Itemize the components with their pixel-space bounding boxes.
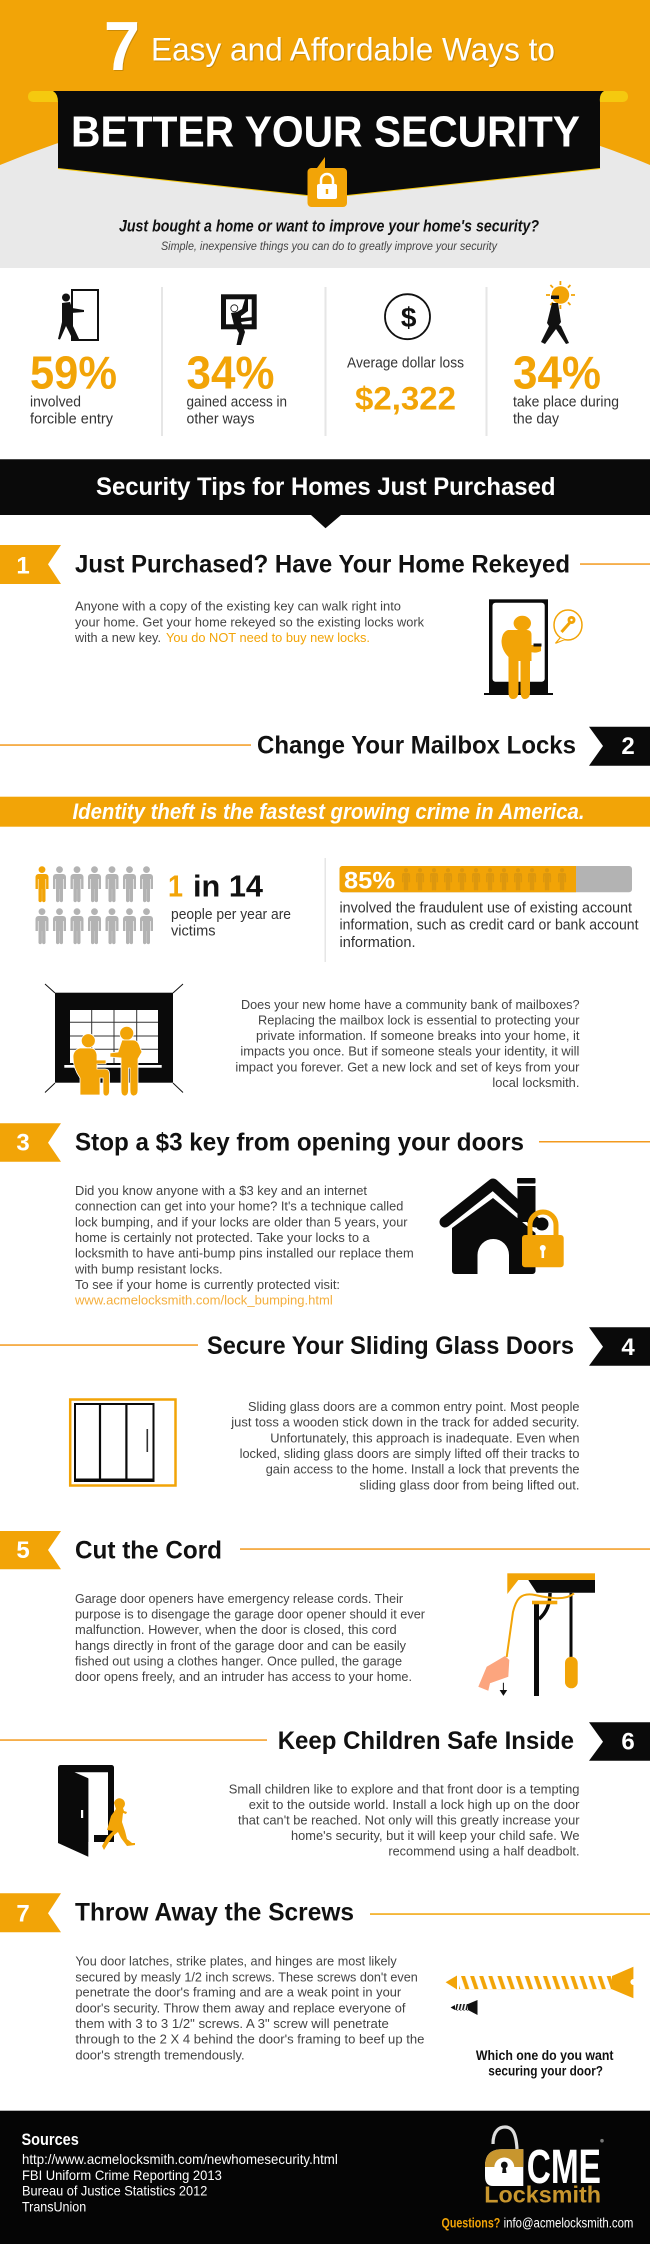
body text 4: Unfortunately, this approach is inadequate. Even when	[270, 1430, 580, 1445]
stats panel	[30, 281, 619, 436]
heading 6: Keep Children Safe Inside	[278, 1727, 574, 1755]
section heading band: Security Tips for Homes Just Purchased	[96, 473, 556, 501]
icon: people at community mailboxes	[45, 984, 183, 1096]
icon: dollar coin: $	[401, 302, 417, 333]
icon: padlock badge	[308, 157, 347, 207]
ribbon number 3	[0, 1123, 61, 1162]
icon: person climbing through window	[224, 297, 255, 345]
ribbon number 3: 3	[16, 1130, 30, 1157]
body text 7: secured by measly 1/2 inch screws. These screws don't even	[75, 1969, 418, 1984]
body text 7: door's security. Throw them away and replace everyone of	[75, 2000, 406, 2015]
body text 1: with a new key.	[74, 630, 161, 645]
body text 7	[75, 1954, 424, 2062]
body text 3: with bump resistant locks.	[74, 1261, 223, 1276]
body text 6: home's security, but it will keep your child safe. We	[291, 1828, 580, 1843]
sources: Sources	[22, 2130, 79, 2149]
body text 4	[230, 1399, 579, 1492]
body text 6: that can't be reached. Not only will this greatly increase your	[238, 1812, 580, 1827]
stat: average dollar loss: Average dollar loss	[347, 355, 464, 372]
heading 7: Throw Away the Screws	[75, 1899, 354, 1927]
stat: 1 in 14: people per year are	[171, 906, 291, 923]
body text 4: locked, sliding glass doors are simply lifted off their tracks to	[240, 1446, 580, 1461]
tip 4	[0, 1327, 650, 1492]
heading 5: Cut the Cord	[75, 1536, 222, 1564]
stat: 85% progress bar: 85%	[344, 867, 395, 894]
body text 7: them with 3 to 3 1/2" screws. A 3" screw will penetrate	[75, 2016, 389, 2031]
stat: 85% progress bar	[340, 866, 639, 951]
logo: ACME Locksmith: Locksmith	[484, 2182, 601, 2208]
stat: forcible entry	[30, 290, 117, 427]
body text 6: recommend using a half deadbolt.	[388, 1844, 580, 1859]
stat: forcible entry: involved	[30, 394, 81, 411]
header panel	[0, 0, 650, 268]
identity theft banner: Identity theft is the fastest growing crime in America.	[72, 799, 584, 824]
banner tabs	[28, 91, 628, 102]
stat: daytime: take place during	[513, 394, 619, 411]
body text 6: exit to the outside world. Install a lock high up on the door	[249, 1797, 580, 1812]
body text 7: through to the 2 X 4 behind the door's framing to beef up the	[75, 2032, 424, 2047]
body text 7: penetrate the door's framing and are a weak point in your	[75, 1985, 402, 2000]
body text 2	[235, 997, 580, 1090]
body text 5: fished out using a clothes hanger. Once pulled, the garage	[75, 1653, 402, 1668]
subtitle: Just bought a home or want to improve your home's security?	[119, 217, 540, 236]
stat: 85% progress bar: involved the fraudulent use of existing account	[340, 899, 633, 916]
stat: 1 in 14: in 14	[193, 869, 264, 904]
icon: child running out of door	[58, 1765, 135, 1857]
body text 2: impacts you once. But if someone steals your identity, it will	[240, 1044, 579, 1059]
stat: 85% progress bar: information, such as credit card or bank account	[340, 916, 639, 933]
body text 1: Anyone with a copy of the existing key can walk right into	[75, 599, 401, 614]
stat: average dollar loss	[347, 294, 464, 416]
body text 3: lock bumping, and if your locks are older than 5 years, your	[75, 1214, 408, 1229]
tip 2	[0, 727, 650, 766]
sources: FBI Uniform Crime Reporting 2013	[22, 2167, 222, 2183]
ribbon number 7	[0, 1893, 61, 1932]
heading 3: Stop a $3 key from opening your doors	[75, 1129, 524, 1157]
tip 6	[0, 1722, 650, 1859]
stat: 1 in 14	[168, 869, 291, 940]
stat: other access: 34%	[186, 346, 274, 398]
tip 5	[0, 1531, 650, 1696]
body text 6: Small children like to explore and that front door is a tempting	[229, 1781, 580, 1796]
body text 3: locksmith to have anti-bump pins installed our replace them	[75, 1246, 414, 1261]
ribbon number 2	[589, 727, 650, 766]
heading 2: Change Your Mailbox Locks	[257, 731, 576, 759]
icon: sliding glass door	[70, 1400, 176, 1486]
stat: average dollar loss: $2,322	[355, 380, 456, 416]
body text 6	[229, 1781, 580, 1859]
ribbon number 7: 7	[16, 1901, 30, 1928]
stat: daytime: 34%	[513, 346, 601, 398]
contact line: Questions?	[442, 2214, 500, 2230]
body text 1: your home. Get your home rekeyed so the existing locks work	[75, 614, 424, 629]
ribbon number 4: 4	[621, 1334, 635, 1361]
icon: person forcing door	[58, 290, 98, 340]
contact line	[442, 2214, 633, 2230]
body text 4: sliding glass door from being lifted out.	[359, 1477, 580, 1492]
icon: person at door with key bubble	[484, 599, 582, 699]
stat: daytime: the day	[513, 410, 559, 427]
tip 7	[0, 1893, 650, 2079]
stat: other access: other ways	[186, 410, 254, 427]
body text 4: just toss a wooden stick down in the track for added security.	[230, 1415, 579, 1430]
icon: short screw	[451, 2000, 478, 2015]
body text 5	[75, 1591, 426, 1684]
black title banner: BETTER YOUR SECURITY	[71, 108, 580, 157]
ribbon number 5	[0, 1531, 61, 1569]
body text 3	[74, 1183, 414, 1308]
body text 3: To see if your home is currently protected visit:	[75, 1277, 340, 1292]
body text 7: door's strength tremendously.	[75, 2047, 245, 2062]
body text 1	[74, 599, 424, 645]
body text 2: private information. If someone breaks into your home, it	[256, 1028, 580, 1043]
body text 5: door opens freely, and an intruder has access to your home.	[75, 1669, 412, 1684]
ribbon number 1: 1	[16, 552, 30, 579]
stat: 1 in 14: 1	[168, 869, 183, 904]
heading 1: Just Purchased? Have Your Home Rekeyed	[75, 550, 570, 578]
tip 3	[0, 1123, 650, 1308]
ribbon number 2: 2	[621, 733, 635, 760]
black title banner	[53, 91, 604, 195]
sources: TransUnion	[22, 2198, 86, 2214]
stat: 85% progress bar: information.	[340, 934, 416, 951]
sub-subtitle: Simple, inexpensive things you can do to greatly improve your security	[161, 239, 498, 253]
title line: Easy and Affordable Ways to	[151, 32, 555, 68]
stat: 1 in 14: victims	[171, 923, 216, 940]
body text 5: purpose is to disengage the garage door opener should it ever	[75, 1607, 426, 1622]
title number 7: 7	[104, 7, 140, 85]
tip 1	[0, 545, 650, 699]
body text 5: malfunction. However, when the door is closed, this cord	[75, 1622, 397, 1637]
section heading band	[0, 459, 650, 528]
screw question	[476, 2047, 614, 2079]
screw question: Which one do you want	[476, 2047, 614, 2063]
body text 5: hangs directly in front of the garage door and can be easily	[75, 1638, 406, 1653]
stat: forcible entry: forcible entry	[30, 410, 113, 427]
sources: Bureau of Justice Statistics 2012	[22, 2183, 207, 2199]
logo: ACME Locksmith	[484, 2127, 604, 2208]
ribbon number 6	[589, 1722, 650, 1761]
stat: other access	[186, 297, 287, 427]
ribbon number 5: 5	[16, 1537, 30, 1564]
icon: long screw	[446, 1967, 633, 1998]
body text 3: www.acmelocksmith.com/lock_bumping.html	[74, 1293, 333, 1308]
body text 7: You door latches, strike plates, and hinges are most likely	[75, 1954, 397, 1969]
sources: http://www.acmelocksmith.com/newhomesecurity.html	[22, 2151, 338, 2167]
stat: forcible entry: 59%	[30, 346, 117, 398]
icon: person under sun	[541, 281, 575, 344]
body text 3: connection can get into your home? It's a technique called	[75, 1199, 403, 1214]
body text 3: Did you know anyone with a $3 key and an internet	[75, 1183, 367, 1198]
body text 5: Garage door openers have emergency release cords. Their	[75, 1591, 404, 1606]
body text 2: local locksmith.	[492, 1075, 579, 1090]
sources	[22, 2130, 338, 2214]
body text 1: You do NOT need to buy new locks.	[166, 630, 370, 645]
body text 2: Does your new home have a community bank of mailboxes?	[241, 997, 580, 1012]
icon: garage door release cord	[478, 1573, 595, 1696]
logo: ACME Locksmith: CME	[527, 2141, 601, 2194]
stat: daytime	[513, 281, 619, 427]
ribbon number 1	[0, 545, 61, 584]
body text 3: home is certainly not protected. Take your locks to a	[75, 1230, 370, 1245]
icon: house with padlock	[445, 1178, 564, 1274]
body text 4: gain access to the home. Install a lock that prevents the	[266, 1462, 580, 1477]
heading 4: Secure Your Sliding Glass Doors	[207, 1332, 574, 1360]
stat: other access: gained access in	[186, 394, 287, 411]
ribbon number 4	[589, 1327, 650, 1366]
body text 2: Replacing the mailbox lock is essential to protecting your	[258, 1012, 580, 1027]
ribbon number 6: 6	[621, 1728, 635, 1755]
screw question: securing your door?	[488, 2063, 603, 2079]
body text 4: Sliding glass doors are a common entry point. Most people	[248, 1399, 580, 1414]
body text 2: impact you forever. Get a new lock and set of keys from your	[235, 1059, 580, 1074]
footer	[0, 2111, 650, 2244]
pictogram: 1 in 14 people	[36, 866, 153, 944]
